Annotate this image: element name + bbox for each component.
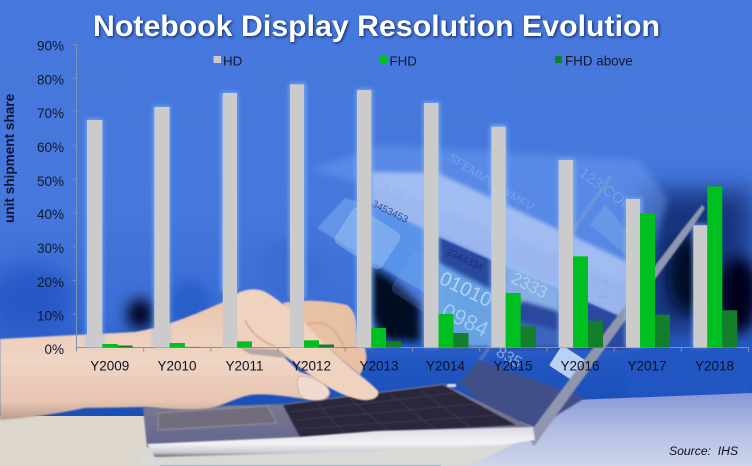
x axis labels: Y2017 xyxy=(627,358,667,374)
x axis labels: Y2009 xyxy=(90,358,129,374)
title: Notebook Display Resolution Evolution xyxy=(93,10,660,43)
x axis labels: Y2015 xyxy=(493,358,533,374)
hand xyxy=(0,289,378,420)
x axis labels xyxy=(90,358,734,374)
laptop screen xyxy=(459,360,585,428)
holographic data panels: 2344334 xyxy=(445,247,485,274)
legend: HD xyxy=(223,54,242,68)
y axis labels: 80% xyxy=(37,72,64,88)
arm and thumb xyxy=(0,300,330,420)
holographic data panels: 2 xyxy=(596,274,610,304)
y axis labels: 0% xyxy=(44,342,64,357)
dark shadow behind Y2013 bars xyxy=(372,268,420,342)
y axis labels: 70% xyxy=(37,106,64,121)
bars glow xyxy=(86,83,709,347)
laptop xyxy=(143,205,705,457)
x axis labels: Y2018 xyxy=(695,358,734,374)
x axis labels: Y2013 xyxy=(359,358,399,374)
holographic data panels: 123.COM xyxy=(576,164,638,216)
keyboard xyxy=(283,385,516,437)
y axis labels: 40% xyxy=(37,207,64,222)
y axis title: unit shipment share xyxy=(2,93,17,223)
bars: FHD xyxy=(102,186,722,348)
holographic data panels: 01010 xyxy=(436,268,495,312)
legend: FHD above xyxy=(565,54,633,68)
desk surface xyxy=(0,393,752,466)
y axis labels: 90% xyxy=(37,38,64,54)
x axis labels: Y2010 xyxy=(157,358,197,374)
thumbnail xyxy=(297,376,329,400)
y axis labels: 30% xyxy=(37,241,64,256)
x axis labels: Y2012 xyxy=(292,358,331,374)
y axis labels: 20% xyxy=(37,275,64,290)
x axis labels: Y2016 xyxy=(560,358,600,374)
holographic data panels: 0111 xyxy=(370,176,408,206)
holographic data panels: SFEMMVOWMFV xyxy=(446,151,536,214)
x axis labels: Y2011 xyxy=(225,358,264,374)
bars: HD xyxy=(87,84,707,348)
title: Notebook Display Resolution Evolution xyxy=(94,11,661,44)
index finger xyxy=(228,289,378,400)
legend: FHD xyxy=(390,54,417,68)
y axis labels xyxy=(37,38,64,357)
y axis labels: 50% xyxy=(37,174,64,189)
holographic data panels: 3453453 xyxy=(370,199,410,226)
axes xyxy=(73,44,749,352)
holographic data panels: 0984 xyxy=(438,298,493,342)
holographic data panels xyxy=(310,145,668,383)
gap shadow between fingers xyxy=(240,348,296,362)
y axis labels: 60% xyxy=(37,140,64,155)
source note: Source: IHS xyxy=(669,444,738,458)
x axis labels: Y2014 xyxy=(426,358,466,374)
legend xyxy=(214,54,633,68)
laptop base xyxy=(143,384,534,447)
holographic data panels: 2333 xyxy=(508,269,551,302)
back finger xyxy=(283,301,366,375)
chart xyxy=(2,38,749,374)
holographic data panels: 835 xyxy=(493,344,525,372)
bars: FHD above xyxy=(118,310,737,348)
y axis labels: 10% xyxy=(37,308,64,324)
laptop front edge xyxy=(147,427,535,457)
